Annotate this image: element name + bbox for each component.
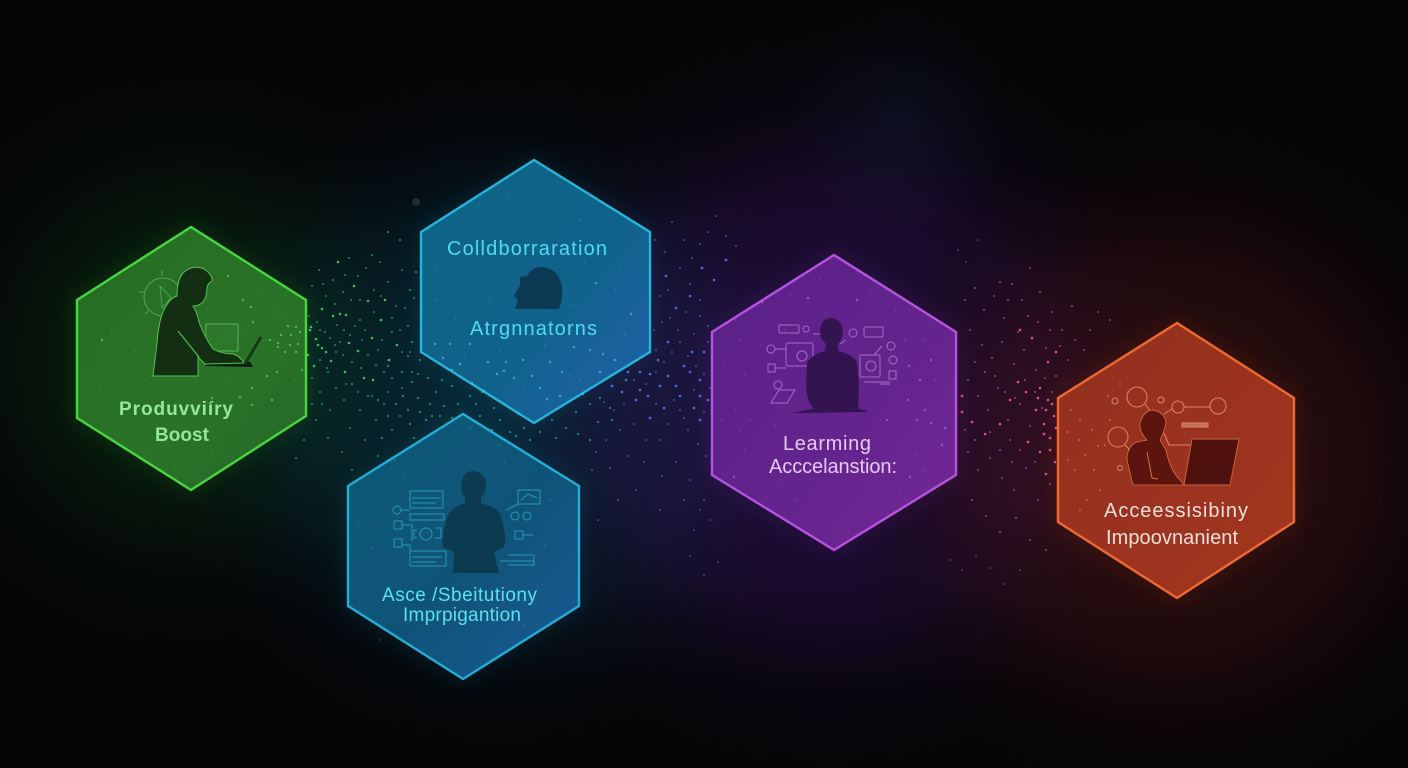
hexagon particles [358,428,560,650]
label: accessibility implementation [382,585,538,626]
icon: person with learning diagrams [767,318,897,413]
label: collaboration: Atrgnnatorns [470,318,597,340]
hexagon particles [88,250,302,470]
label: accessibility improvement: Impoovnanient [1106,527,1238,549]
label: productivity boost: Produvviíry [119,399,233,420]
label: learning acceleration [769,433,897,478]
icon: person at laptop with network [1108,387,1239,485]
label: accessibility improvement [1104,500,1248,549]
label: collaboration [447,238,607,340]
icon: head silhouette [514,267,562,309]
label: accessibility implementation: Asce /Sbeitutiony [382,585,538,606]
hexagon particles [435,190,640,410]
hexagon particles [722,278,945,520]
icon: person with diagrams [393,471,540,573]
hexagon particles [1067,384,1120,510]
panel: accessibility implementation [348,414,579,679]
label: learning acceleration: Learming [783,433,871,455]
panel: learning acceleration [712,255,956,550]
label: learning acceleration: Acccelanstion: [769,456,897,478]
panel: accessibility improvement [1058,323,1294,598]
label: accessibility implementation: Imprpigantion [403,605,521,626]
label: productivity boost [119,399,233,446]
label: productivity boost: Boost [155,425,210,446]
icon: person at laptop [139,267,261,376]
label: collaboration: Colldborraration [447,238,607,260]
panel: collaboration [421,160,650,423]
label: accessibility improvement: Acceessisibiny [1104,500,1248,522]
panel: productivity boost [77,227,306,490]
